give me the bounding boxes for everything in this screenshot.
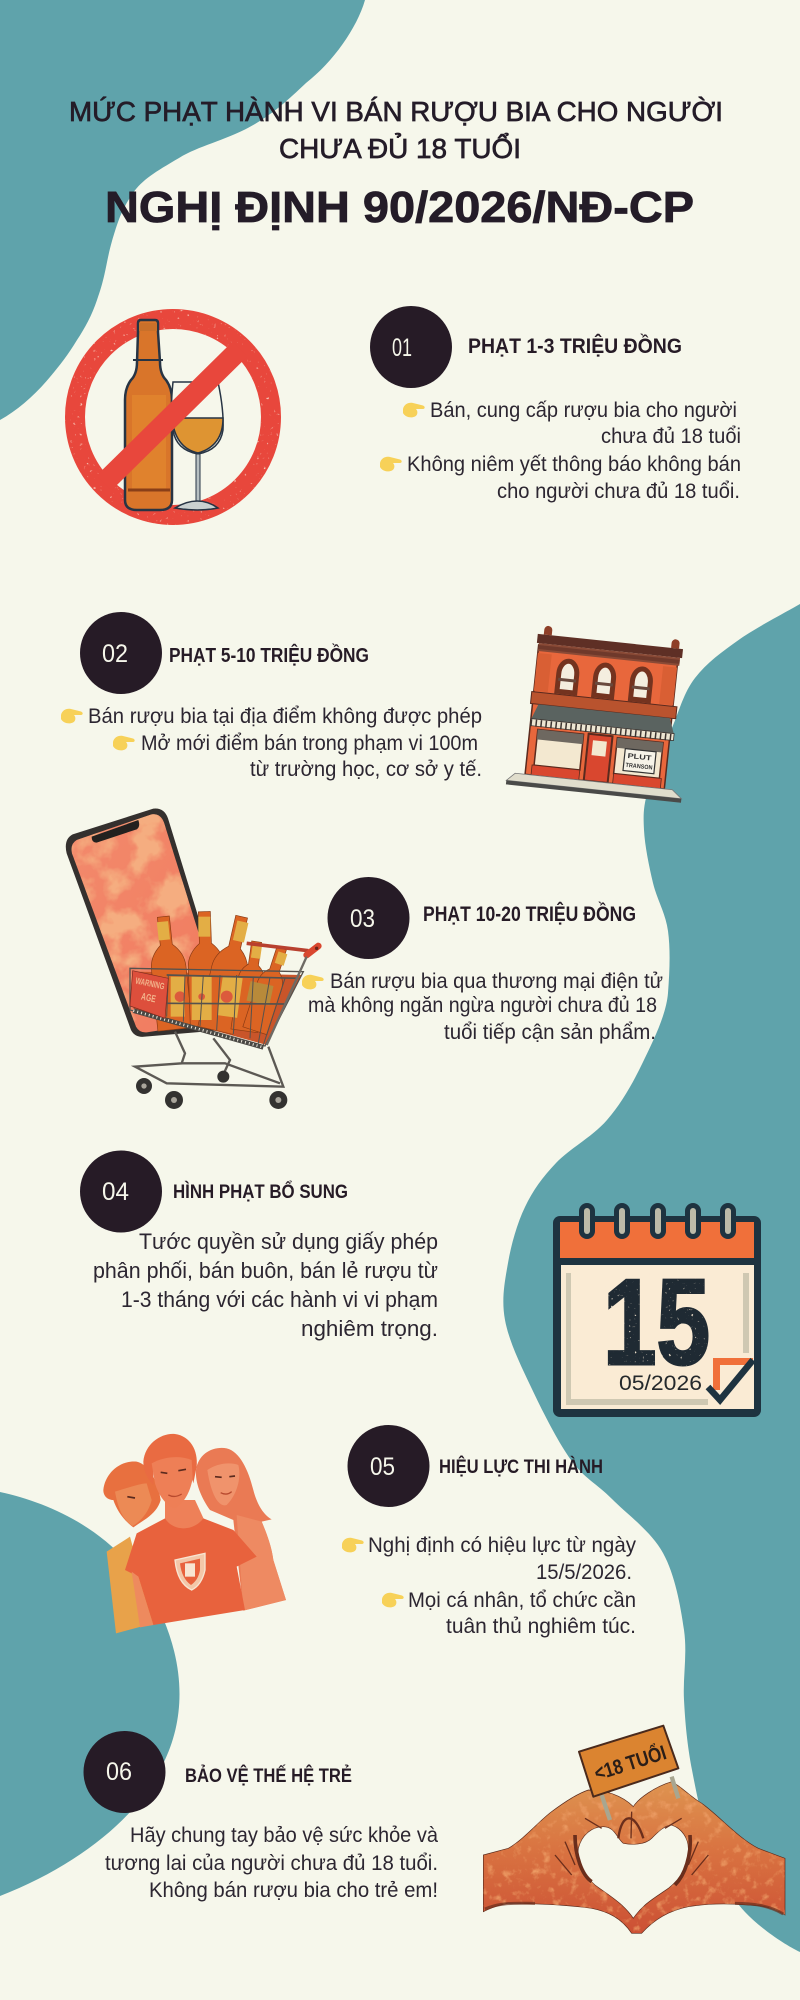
- body text 06: tương lai của người chưa đủ 18 tuổi.: [105, 1852, 438, 1875]
- cart basket: [130, 968, 303, 1047]
- heading 05: HIỆU LỰC THI HÀNH: [439, 1456, 603, 1478]
- badge 01: 01: [392, 334, 412, 362]
- badge 02: 02: [102, 640, 128, 668]
- bottles: [133, 911, 302, 1045]
- cart handle: [247, 943, 308, 951]
- bullet icon: [403, 403, 425, 417]
- icon: calendar 15/05/2026: [553, 1203, 761, 1417]
- icon: no alcohol sign: [75, 319, 271, 515]
- date number: 15: [603, 1254, 710, 1390]
- body text 04: [93, 1229, 438, 1341]
- background blob: top left: [0, 0, 365, 420]
- body text 01: cho người chưa đủ 18 tuổi.: [497, 480, 740, 503]
- title block: [69, 96, 723, 232]
- body text 05: tuân thủ nghiêm túc.: [446, 1615, 636, 1638]
- section 04: [80, 1150, 438, 1341]
- heading 04: HÌNH PHẠT BỔ SUNG: [173, 1181, 348, 1203]
- background blob: right side: [503, 604, 800, 1952]
- heading 01: PHẠT 1-3 TRIỆU ĐỒNG: [468, 334, 682, 358]
- title line 1: MỨC PHẠT HÀNH VI BÁN RƯỢU BIA CHO NGƯỜI: [69, 96, 723, 127]
- icon: three teenagers: [103, 1434, 286, 1633]
- cart frame: [135, 1032, 283, 1087]
- icon: phone and shopping cart with beer: [66, 809, 318, 1109]
- badge 06: [84, 1731, 166, 1813]
- body text 05: Mọi cá nhân, tổ chức cần: [408, 1589, 636, 1612]
- badge 02: [80, 612, 162, 694]
- body text 05: 15/5/2026.: [536, 1561, 632, 1584]
- body text 06: [105, 1824, 438, 1902]
- section 01: [370, 306, 741, 503]
- section 06: [84, 1731, 438, 1902]
- section 02: [61, 612, 482, 781]
- body text 06: Hãy chung tay bảo vệ sức khỏe và: [130, 1824, 438, 1847]
- body text 01: chưa đủ 18 tuổi: [601, 425, 741, 448]
- body text 04: nghiêm trọng.: [301, 1316, 438, 1341]
- body text 03: tuổi tiếp cận sản phẩm.: [444, 1021, 656, 1044]
- icon: shop building: TRANSON: [625, 763, 653, 772]
- body text 04: Tước quyền sử dụng giấy phép: [139, 1229, 438, 1254]
- background blob: bottom left: [0, 1492, 180, 1896]
- bullet icon: [380, 457, 402, 471]
- title line 2: CHƯA ĐỦ 18 TUỔI: [279, 132, 521, 164]
- icon: phone and shopping cart with beer: WARNING: [135, 976, 165, 991]
- badge 04: 04: [102, 1178, 129, 1206]
- decree number heading: NGHỊ ĐỊNH 90/2026/NĐ-CP: [105, 183, 694, 232]
- calendar rings: [579, 1203, 736, 1239]
- body text 02: Bán rượu bia tại địa điểm không được phép: [88, 705, 482, 728]
- body text 02: từ trường học, cơ sở y tế.: [250, 758, 482, 781]
- icon: shop building: PLUT: [627, 753, 653, 762]
- body text 03: Bán rượu bia qua thương mại điện tử: [330, 970, 663, 993]
- icon: shop building: [506, 623, 698, 803]
- shirt shield: [175, 1553, 205, 1590]
- hands: [483, 1782, 785, 1933]
- badge 04: [80, 1150, 162, 1232]
- bullet icon: [113, 736, 135, 750]
- sign board: [579, 1726, 678, 1797]
- section 05: [342, 1425, 636, 1638]
- body text 04: phân phối, bán buôn, bán lẻ rượu từ: [93, 1258, 438, 1283]
- badge 06: 06: [106, 1758, 132, 1786]
- badge 03: [328, 877, 410, 959]
- body text 05: Nghị định có hiệu lực từ ngày: [368, 1534, 636, 1557]
- body text 01: Bán, cung cấp rượu bia cho người: [430, 399, 737, 422]
- badge 05: [348, 1425, 430, 1507]
- badge 05: 05: [370, 1453, 395, 1481]
- checkbox and tick: [708, 1358, 753, 1400]
- icon: heart hands holding under-18 sign: [483, 1726, 785, 1933]
- badge 01: [370, 306, 452, 388]
- badge 03: 03: [350, 905, 375, 933]
- body text 01: Không niêm yết thông báo không bán: [407, 453, 741, 476]
- bullet icon: [382, 1593, 404, 1607]
- sign posts: [602, 1777, 678, 1820]
- icon: phone and shopping cart with beer: AGE: [140, 992, 157, 1005]
- body text 06: Không bán rượu bia cho trẻ em!: [149, 1879, 438, 1902]
- body text 01: [407, 399, 741, 503]
- body text 05: [368, 1534, 636, 1638]
- bullet icon: [342, 1538, 364, 1552]
- bullet icon: [61, 709, 83, 723]
- sign text: <18 TUỔI: [591, 1740, 669, 1785]
- body text 03: mà không ngăn ngừa người chưa đủ 18: [308, 994, 657, 1017]
- bullet icon: [302, 975, 324, 989]
- heading 03: PHẠT 10-20 TRIỆU ĐỒNG: [423, 902, 636, 926]
- month and year: 05/2026: [619, 1372, 702, 1395]
- body text 03: [308, 970, 663, 1044]
- body text 04: 1-3 tháng với các hành vi vi phạm: [121, 1287, 438, 1312]
- cart wheels: [136, 1071, 287, 1109]
- body text 02: Mở mới điểm bán trong phạm vi 100m: [141, 732, 478, 755]
- section 03: [302, 877, 663, 1044]
- body text 02: [88, 705, 482, 781]
- heading 02: PHẠT 5-10 TRIỆU ĐỒNG: [169, 643, 369, 667]
- heading 06: BẢO VỆ THẾ HỆ TRẺ: [185, 1765, 352, 1787]
